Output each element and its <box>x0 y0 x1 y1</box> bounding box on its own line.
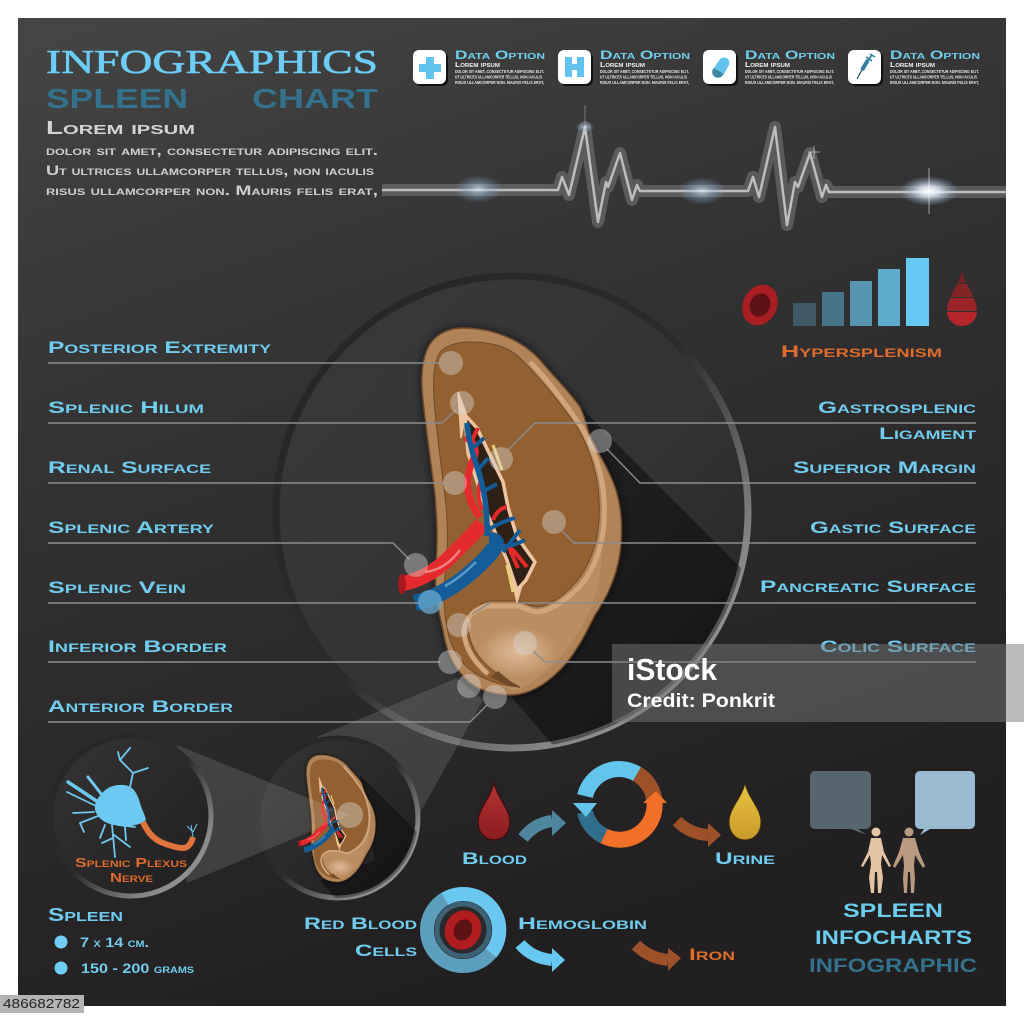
hypersplenism label: Hypersplenism <box>781 343 942 361</box>
speech bubble left <box>810 771 871 835</box>
callout dots <box>404 351 612 709</box>
cycle ring <box>573 769 667 840</box>
hypersplenism chart <box>736 258 979 361</box>
figure: man <box>893 828 925 893</box>
blood cycle diagram <box>462 769 775 868</box>
small spleen callout dot <box>337 802 363 828</box>
nerve magnifier <box>51 736 211 896</box>
urine label: Urine <box>715 850 775 868</box>
data option 2: hospital: UT ULTRICES ULLAMCORPER TELLUS, NON IACULIS <box>600 74 687 80</box>
data option 3: pill <box>703 50 835 86</box>
figure: woman <box>861 828 891 893</box>
right labels: Superior Margin <box>793 459 976 477</box>
data options row <box>413 50 980 86</box>
intro paragraph: risus ullamcorper non. Mauris felis erat, <box>46 183 378 198</box>
data option 1: cross: UT ULTRICES ULLAMCORPER TELLUS, NON IACULIS <box>455 74 542 80</box>
data option 4: syringe: Data Option <box>890 50 980 62</box>
title block <box>46 44 378 198</box>
people with speech bubbles: INFOGRAPHIC <box>809 956 977 977</box>
left labels: Anterior Border <box>48 698 233 716</box>
data option 2: hospital: Data Option <box>600 50 690 62</box>
intro heading: Lorem ipsum <box>46 118 195 138</box>
spleen facts: 150 - 200 grams <box>81 961 194 976</box>
data option 3: pill: Lorem ipsum <box>745 62 790 69</box>
closing title: SPLEEN <box>843 901 943 922</box>
data option 1: cross: RISUS ULLAMCORPER NON. MAURIS FELIS ERAT, <box>455 80 544 85</box>
data option 3: pill: DOLOR SIT AMET, CONSECTETUR ADIPISCING ELIT. <box>745 69 834 74</box>
arrow: cycle to urine <box>677 821 721 847</box>
data option 4: syringe: UT ULTRICES ULLAMCORPER TELLUS, NON IACULIS <box>890 74 977 80</box>
data option 1: cross <box>413 50 545 86</box>
iron label: Iron <box>689 946 735 964</box>
data option 1: cross: DOLOR SIT AMET, CONSECTETUR ADIPISCING ELIT. <box>455 69 544 74</box>
left labels: Posterior Extremity <box>48 339 271 357</box>
data option 2: hospital: Lorem ipsum <box>600 62 645 69</box>
heartbeat line <box>382 105 1006 225</box>
left labels: Splenic Hilum <box>48 399 204 417</box>
title: infographics: INFOGRAPHICS <box>46 44 378 81</box>
icon: urine drop <box>729 783 761 840</box>
data option 4: syringe: Lorem ipsum <box>890 62 935 69</box>
watermark band <box>612 644 1024 722</box>
stock id tag <box>0 995 84 1013</box>
right labels: Ligament <box>879 425 977 443</box>
callout leader lines <box>48 363 976 722</box>
small spleen magnifier <box>261 736 420 900</box>
data option 4: syringe <box>848 50 980 86</box>
icon: red blood cell <box>736 279 784 331</box>
right labels <box>760 399 977 656</box>
red blood cell pathway: Cells <box>355 942 417 960</box>
right labels: Gastic Surface <box>810 519 976 537</box>
data option 2: hospital <box>558 50 690 86</box>
red blood cells label: Red Blood <box>304 915 417 933</box>
people with speech bubbles <box>809 771 977 977</box>
data option 4: syringe: RISUS ULLAMCORPER NON. MAURIS FELIS ERAT, <box>890 80 979 85</box>
blood label: Blood <box>462 850 527 868</box>
data option 2: hospital: RISUS ULLAMCORPER NON. MAURIS FELIS ERAT, <box>600 80 689 85</box>
icon: blood level drop <box>947 270 977 326</box>
light cone from small spleen to anterior border <box>317 678 483 813</box>
data option 3: pill: Data Option <box>745 50 835 62</box>
right labels: Gastrosplenic <box>818 399 976 417</box>
cone from nerve to small spleen <box>177 745 350 883</box>
bar chart <box>793 258 929 326</box>
spleen facts <box>48 905 194 976</box>
left labels: Splenic Artery <box>48 519 214 537</box>
nerve label: Splenic Plexus <box>75 855 187 870</box>
people with speech bubbles: INFOCHARTS <box>815 928 972 949</box>
left labels: Inferior Border <box>48 638 228 656</box>
subtitle: chart: CHART <box>252 83 378 114</box>
left labels <box>48 339 271 716</box>
data option 3: pill: UT ULTRICES ULLAMCORPER TELLUS, NON IACULIS <box>745 74 832 80</box>
arrow: to hemoglobin product <box>520 944 565 972</box>
watermark: credit: Credit: Ponkrit <box>627 691 776 712</box>
icon: ringed blood cell <box>427 894 499 966</box>
intro paragraph: dolor sit amet, consectetur adipiscing elit. <box>46 143 378 158</box>
spleen anatomy illustration <box>398 328 622 695</box>
subtitle: spleen: SPLEEN <box>46 83 188 114</box>
icon: blood drop <box>478 782 510 840</box>
hemoglobin label: Hemoglobin <box>518 915 647 933</box>
stock id tag: 486682782 <box>3 996 80 1011</box>
data option 1: cross: Lorem ipsum <box>455 62 500 69</box>
right labels: Pancreatic Surface <box>760 578 976 596</box>
long shadow of spleen <box>511 410 742 744</box>
data option 3: pill: RISUS ULLAMCORPER NON. MAURIS FELIS ERAT, <box>745 80 834 85</box>
left labels: Splenic Vein <box>48 579 186 597</box>
nerve magnifier: Nerve <box>110 870 153 885</box>
left labels: Renal Surface <box>48 459 211 477</box>
spleen facts: 7 x 14 cm. <box>80 935 149 950</box>
icon: nerve cell <box>67 748 197 857</box>
data option 4: syringe: DOLOR SIT AMET, CONSECTETUR ADIPISCING ELIT. <box>890 69 979 74</box>
main spleen lens circle <box>274 272 752 752</box>
speech bubble right <box>915 771 975 835</box>
intro paragraph: Ut ultrices ullamcorper tellus, non iaculis <box>46 163 374 178</box>
red blood cell pathway <box>304 894 735 972</box>
data option 1: cross: Data Option <box>455 50 545 62</box>
data option 2: hospital: DOLOR SIT AMET, CONSECTETUR ADIPISCING ELIT. <box>600 69 689 74</box>
arrow: blood to cycle <box>523 810 566 838</box>
arrow: to iron <box>636 945 681 971</box>
watermark: brand: iStock <box>627 652 718 687</box>
spleen facts: Spleen <box>48 905 123 925</box>
right labels: Colic Surface <box>820 638 976 656</box>
intro paragraph <box>46 143 378 198</box>
